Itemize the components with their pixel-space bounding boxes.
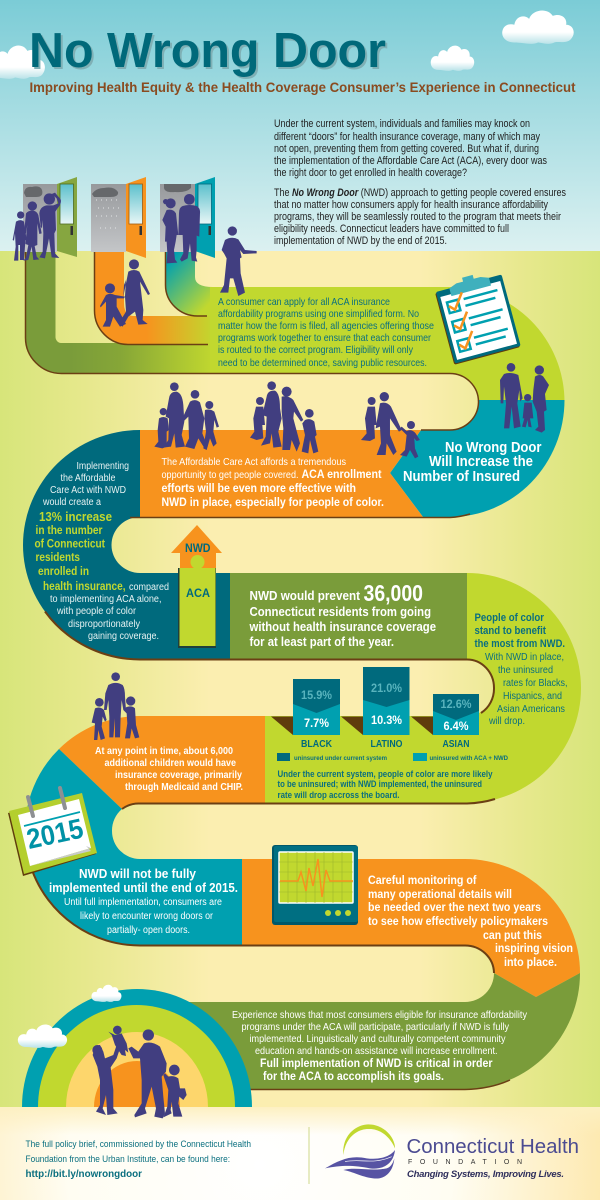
background sky (0, 0, 600, 252)
text: 13% increase: disproportionately (68, 619, 140, 630)
text: 13% increase (34, 461, 169, 642)
rainbow arch (22, 989, 252, 1107)
chart legend: uninsured with ACA + NWD (430, 755, 508, 762)
logo tagline: Changing Systems, Improving Lives. (407, 1169, 564, 1180)
text: simplified form (218, 296, 434, 369)
text: careful monitoring: into place. (504, 957, 557, 969)
door: orange (91, 177, 146, 258)
orange band (140, 430, 423, 517)
bar: latino: 21.0% (371, 681, 402, 695)
arrow: NWD on ACA (171, 525, 222, 648)
clipboard icon (433, 268, 521, 365)
text: full implementation: for the ACA to accomplish its goals. (263, 1071, 444, 1083)
text: careful monitoring: to see how effectively policymakers (368, 916, 548, 928)
text: chart note: rate will drop accross the board. (278, 790, 400, 801)
teal left curve (25, 749, 242, 945)
calendar icon (8, 788, 97, 876)
path from orange door (94, 252, 215, 344)
intro text: the right door to get enrolled in health coverage? (274, 167, 467, 179)
cloud top right (502, 11, 574, 44)
text: 13% increase: residents (36, 550, 80, 564)
text: full implementation: Full implementation of NWD is critical in order (260, 1058, 493, 1070)
intro text: eligibility needs. Connecticut leaders have committed to full (274, 223, 509, 235)
text: people of color: the uninsured (498, 665, 553, 676)
text: not until 2015: Until full implementation, consumers are (64, 897, 222, 908)
footer panel (0, 1107, 600, 1200)
arrow: NWD on ACA: ACA (186, 586, 210, 600)
olive lower band (180, 973, 580, 1089)
bar: latino: LATINO (370, 738, 402, 750)
text: people of color: the most from NWD. (474, 638, 565, 650)
chart legend: uninsured under current system (294, 755, 387, 762)
text: full implementation: education and hands-on assistance will increase enrollment. (255, 1045, 498, 1057)
child (163, 1065, 187, 1117)
text: ACA enrollment: The Affordable Care Act affords a tremendous (162, 456, 346, 468)
bar chart: uninsured rates (271, 667, 479, 750)
text: simplified form: need to be determined once, saving public resources. (218, 357, 427, 369)
mother and child on orange path (100, 259, 150, 327)
text: people of color (474, 612, 568, 727)
bar: asian: 6.4% (444, 719, 469, 733)
text: full implementation: Experience shows that most consumers eligible for insurance affordability (232, 1009, 528, 1021)
lime curve (265, 573, 581, 803)
family group on teal curve (500, 363, 549, 433)
text: 13% increase: 13% increase (39, 509, 112, 524)
text: chart note: to be uninsured; with NWD implemented, the uninsured (278, 779, 482, 790)
people at teal door (162, 194, 200, 263)
text: simplified form: matter how the form is filed, all agencies offering those (218, 320, 434, 332)
text: 13% increase: compared (129, 582, 169, 593)
text: children coverage: insurance coverage, primarily (115, 769, 242, 781)
text: 13% increase: enrolled in (38, 564, 89, 578)
text: simplified form: affordability programs using one simplified form. No (218, 308, 419, 320)
text: children coverage: through Medicaid and CHIP. (125, 781, 243, 793)
bar: asian: 12.6% (440, 697, 472, 711)
door: green (23, 177, 77, 257)
cloud on arch left (18, 1024, 67, 1048)
text: prevent 36,000 (249, 580, 436, 649)
text: not until 2015: NWD will not be fully (79, 866, 197, 881)
title: No Wrong Door (29, 24, 386, 78)
cloud on arch top (92, 985, 121, 1002)
text: people of color: People of color (474, 612, 545, 624)
intro text: the implementation of the Affordable Care Act (ACA), every door was (274, 155, 547, 167)
text: full implementation (232, 1009, 528, 1083)
door: teal (160, 177, 215, 258)
text: not until 2015 (49, 866, 238, 936)
heading: increase insured: Will Increase the (429, 453, 533, 470)
cloud left (0, 46, 45, 79)
family: children coverage (92, 672, 139, 740)
text: simplified form: A consumer can apply for all ACA insurance (218, 296, 390, 308)
heading: increase insured: No Wrong Door (445, 439, 542, 456)
text: not until 2015: partially- open doors. (107, 925, 190, 936)
intro text (274, 118, 566, 247)
footer text: Foundation from the Urban Institute, can be found here: (26, 1154, 230, 1165)
orange lower band (242, 859, 580, 997)
text: children coverage: At any point in time, about 6,000 (95, 745, 233, 757)
text: prevent 36,000: for at least part of the year. (250, 634, 394, 649)
intro text: implementation of NWD by the end of 2015. (274, 235, 447, 247)
calendar icon: 2015 (24, 813, 86, 855)
arrow: NWD on ACA: NWD (185, 541, 211, 555)
bar: asian: ASIAN (442, 738, 470, 750)
text: careful monitoring (368, 875, 573, 969)
text: people of color: With NWD in place, (485, 652, 564, 663)
text: people of color: Asian Americans (497, 704, 565, 715)
bar: latino: 10.3% (371, 713, 402, 727)
text: 13% increase: with people of color (56, 606, 137, 617)
text: 13% increase: the Affordable (60, 473, 116, 484)
text: prevent 36,000: NWD would prevent (250, 588, 361, 603)
logo name: Connecticut Health (406, 1136, 579, 1158)
text: 13% increase: would create a (42, 497, 101, 508)
text: careful monitoring: many operational details will (368, 889, 512, 901)
text: careful monitoring: be needed over the next two years (368, 902, 541, 914)
text: chart note (278, 769, 493, 801)
bar: black: BLACK (301, 738, 332, 750)
text: 13% increase: gaining coverage. (88, 631, 159, 642)
bar: black: 7.7% (304, 716, 329, 730)
heading: increase insured: Number of Insured (403, 468, 520, 485)
text: prevent 36,000: Connecticut residents from going (250, 604, 431, 619)
text: careful monitoring: can put this (483, 930, 542, 942)
text: children coverage (95, 745, 243, 793)
text: careful monitoring: Careful monitoring of (368, 875, 477, 887)
intro text: not open, preventing them from getting covered. But what if, during (274, 143, 539, 155)
families walking (154, 381, 420, 458)
people at green door (13, 193, 61, 261)
text: full implementation: programs under the ACA will participate, particularly if NWD is fully (242, 1021, 510, 1033)
person with open arm (220, 226, 257, 296)
teal curve (390, 400, 564, 517)
text: 13% increase: Care Act with NWD (50, 485, 126, 496)
lime band (210, 287, 564, 402)
text: people of color: stand to benefit (474, 625, 546, 637)
brown ribbon edges (25, 252, 510, 1090)
cloud middle (431, 46, 474, 71)
monitor icon (272, 845, 358, 925)
text: not until 2015: likely to encounter wrong doors or (80, 911, 214, 922)
text: 13% increase: in the number (36, 523, 103, 537)
chart legend (277, 753, 508, 762)
text: ACA enrollment: NWD in place, especially for people of color. (162, 497, 384, 509)
bar: latino (363, 667, 410, 750)
bar: black: 15.9% (301, 688, 332, 702)
dark teal curve (23, 430, 230, 659)
bar: asian (433, 694, 479, 750)
orange left band (59, 716, 265, 809)
text: ACA enrollment: opportunity to get people covered. (162, 469, 298, 481)
logo: Connecticut Health Foundation (325, 1124, 579, 1180)
text: full implementation: implemented. Linguistically and culturally competent community (250, 1033, 506, 1045)
text: simplified form: is routed to the correct program. Eligibility will only (218, 344, 414, 356)
text: ACA enrollment: efforts will be even more effective with (162, 483, 356, 495)
family with baby (92, 1026, 187, 1118)
subtitle: Improving Health Equity & the Health Coverage Consumer’s Experience in Connecticut (30, 79, 576, 95)
text: people of color: will drop. (488, 716, 525, 727)
text: careful monitoring: inspiring vision (495, 943, 573, 955)
baby (108, 1026, 128, 1056)
text: people of color: rates for Blacks, (503, 678, 568, 689)
text: ACA enrollment (162, 456, 384, 509)
text: simplified form: programs work together to ensure that each consumer (218, 332, 431, 344)
text: ACA enrollment: ACA enrollment (302, 469, 382, 481)
text: 13% increase: of Connecticut (34, 536, 105, 550)
logo subname: FOUNDATION (408, 1159, 522, 1166)
text: not until 2015: implemented until the end of 2015. (49, 880, 238, 895)
text: children coverage: additional children would have (104, 757, 236, 769)
text: people of color: Hispanics, and (503, 691, 562, 702)
text: 13% increase: to implementing ACA alone, (50, 594, 162, 605)
logo mark (325, 1124, 395, 1179)
text: prevent 36,000: without health insurance coverage (249, 619, 436, 634)
path from green door (26, 252, 215, 373)
footer text: http://bit.ly/nowrongdoor (26, 1168, 142, 1180)
heading: increase insured (403, 439, 542, 485)
text: chart note: Under the current system, people of color are more likely (278, 769, 493, 780)
title: No Wrong Door (31, 26, 388, 80)
path from teal door (166, 252, 215, 316)
text: 13% increase: health insurance, (43, 579, 126, 593)
doors (23, 177, 215, 258)
footer divider (308, 1127, 310, 1184)
mother (92, 1045, 120, 1115)
intro text: different “doors” for health insurance coverage, many of which may (274, 131, 540, 143)
background ground (0, 251, 600, 1108)
text: prevent 36,000: 36,000 (364, 580, 423, 606)
father (128, 1029, 167, 1118)
intro text: Under the current system, individuals and families may knock on (274, 118, 530, 130)
winding path ribbon (23, 252, 581, 1089)
text: 13% increase: Implementing (76, 461, 129, 472)
olive band (230, 573, 467, 659)
footer text (26, 1139, 251, 1180)
footer text: The full policy brief, commissioned by the Connecticut Health (26, 1139, 251, 1150)
bar: black (293, 679, 340, 750)
